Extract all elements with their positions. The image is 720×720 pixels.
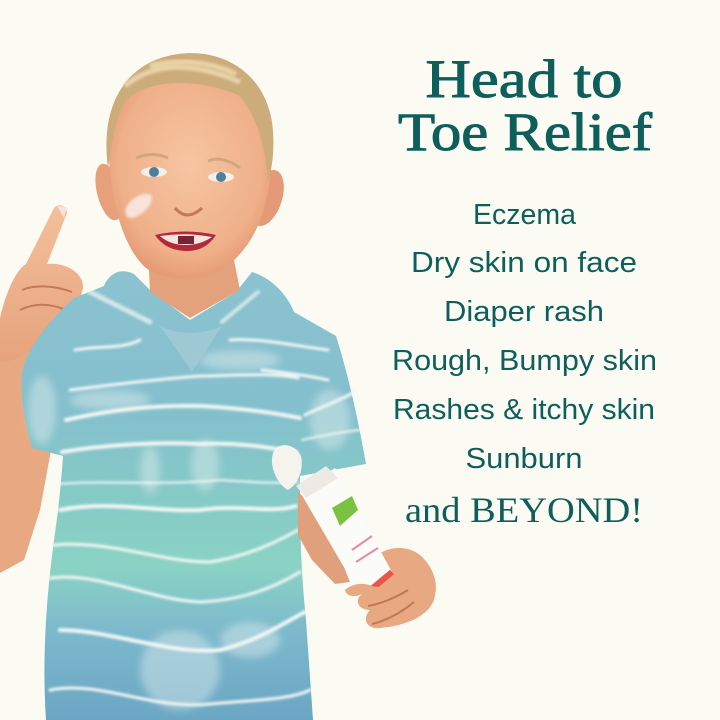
boy's raised arm and pointing hand — [0, 205, 83, 573]
list of skin conditions: Sunburn — [466, 443, 582, 475]
cream on cheek — [126, 194, 152, 218]
list of skin conditions: Eczema — [473, 199, 577, 231]
boy's lower right arm — [298, 492, 350, 584]
title: Head to — [426, 49, 622, 109]
product tube — [272, 445, 392, 598]
fingers holding tube — [345, 574, 435, 628]
ears — [90, 161, 128, 223]
title — [398, 49, 652, 162]
title: Toe Relief — [398, 102, 652, 162]
boy's neck — [148, 250, 240, 318]
boy's head — [90, 53, 290, 279]
nose — [175, 208, 202, 215]
eyebrows — [136, 154, 240, 168]
list of skin conditions: Rough, Bumpy skin — [392, 345, 657, 377]
list of skin conditions: Rashes & itchy skin — [393, 394, 655, 426]
eyes — [141, 167, 167, 177]
list of skin conditions — [392, 199, 657, 475]
list of skin conditions: Dry skin on face — [411, 247, 637, 279]
palm behind tube — [370, 548, 436, 614]
hair — [106, 53, 273, 182]
face — [108, 72, 272, 279]
mouth — [155, 232, 216, 251]
tie-dye streaks — [50, 292, 360, 705]
photo: boy holding tube — [0, 53, 436, 720]
t-shirt — [21, 271, 366, 720]
list of skin conditions: Diaper rash — [444, 296, 604, 328]
tie-dye pale patches — [28, 350, 350, 710]
closing line: and BEYOND! — [405, 490, 643, 530]
hood seam — [160, 326, 222, 372]
